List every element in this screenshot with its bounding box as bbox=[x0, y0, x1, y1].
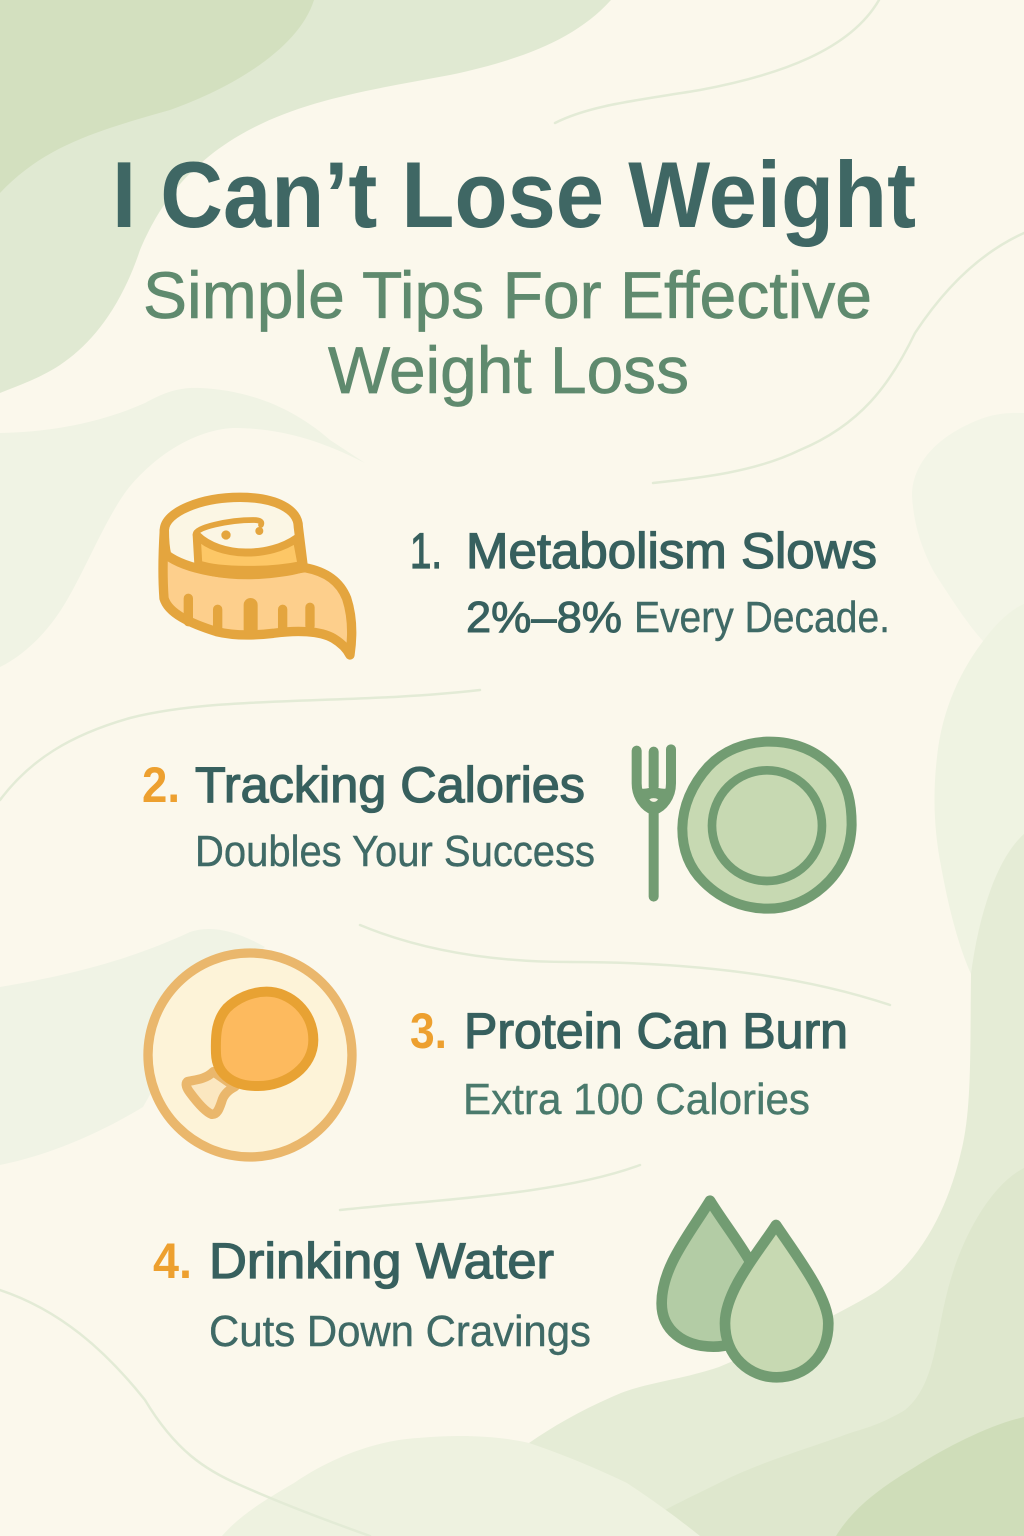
tip 2: tracking calories bbox=[142, 742, 852, 909]
tip 1 stat: 2%–8% bbox=[466, 593, 622, 642]
tip 1: metabolism bbox=[163, 497, 890, 655]
tip 2 number: 2. bbox=[142, 757, 180, 813]
tip 3 title: Protein Can Burn bbox=[464, 1003, 848, 1059]
icon: water drops bbox=[662, 1201, 828, 1377]
title: I Can’t Lose Weight bbox=[112, 142, 916, 247]
tip 4 number: 4. bbox=[153, 1233, 192, 1289]
tip 1 text: Every Decade. bbox=[634, 593, 890, 642]
tip 1 title: Metabolism Slows bbox=[466, 523, 877, 579]
icon: measuring tape bbox=[163, 497, 352, 655]
icon: chicken drumstick bbox=[148, 953, 352, 1157]
subtitle bbox=[143, 258, 872, 407]
subtitle: Simple Tips For Effective bbox=[143, 258, 872, 332]
tip 2 title: Tracking Calories bbox=[195, 757, 585, 813]
tip 4 title: Drinking Water bbox=[209, 1233, 554, 1289]
tip 1 number: 1. bbox=[410, 523, 442, 579]
tip 3 number: 3. bbox=[410, 1003, 447, 1059]
tip 3: protein bbox=[148, 953, 848, 1157]
tip 3 text: Extra 100 Calories bbox=[463, 1075, 810, 1124]
icon: fork and plate bbox=[637, 742, 852, 909]
tip 4 text: Cuts Down Cravings bbox=[209, 1307, 591, 1356]
tip 2 text: Doubles Your Success bbox=[195, 827, 595, 876]
subtitle: Weight Loss bbox=[328, 333, 689, 407]
tip 4: water bbox=[153, 1201, 828, 1377]
